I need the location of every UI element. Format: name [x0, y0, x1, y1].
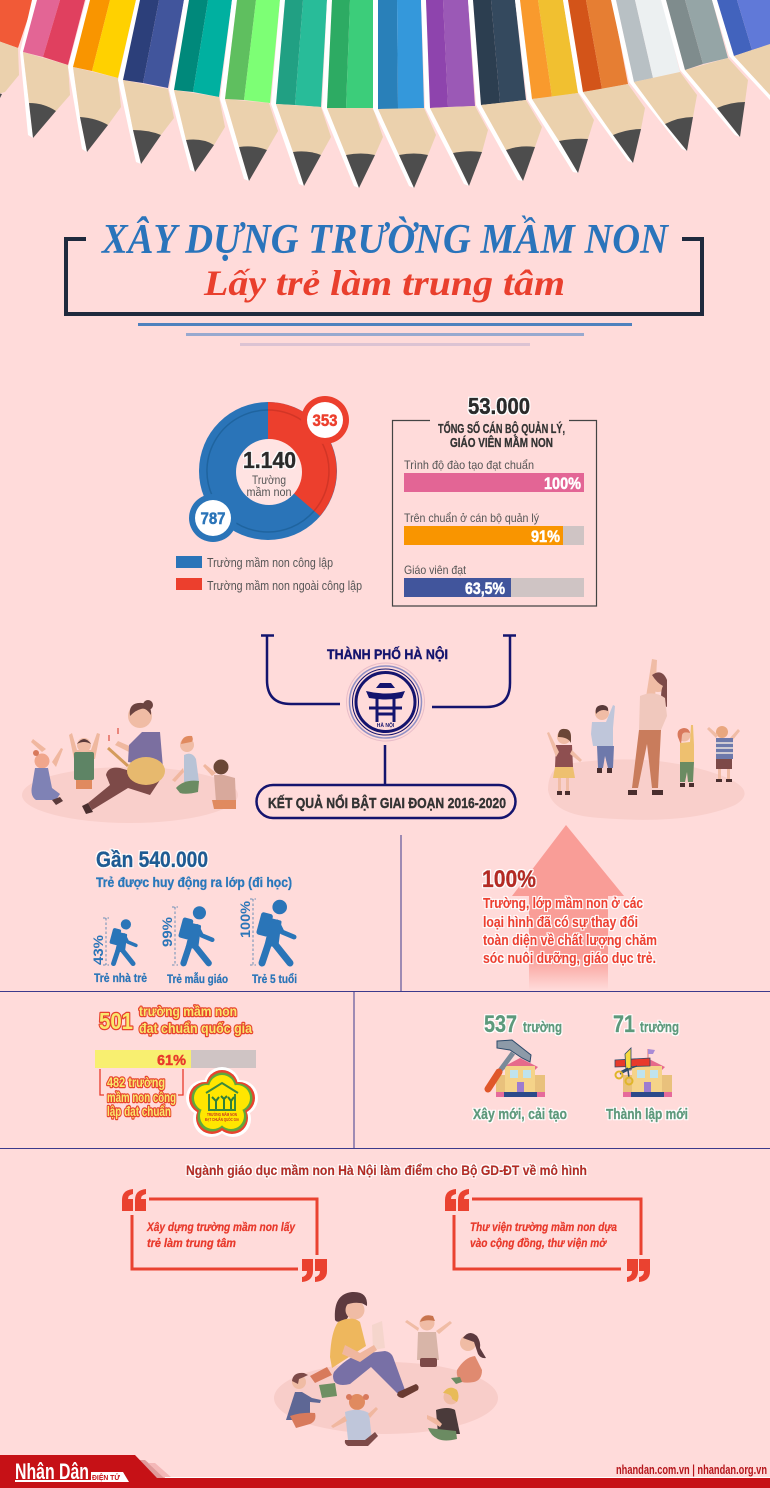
quote card: child-centred school [122, 1189, 327, 1282]
legend [176, 556, 362, 593]
staff heading: TỔNG SỐ CÁN BỘ QUẢN LÝ, [438, 421, 565, 436]
badge 353 [301, 396, 349, 444]
subheading: Trẻ được huy động ra lớp (đi học) [96, 874, 292, 890]
panel: staff statistics [392, 393, 596, 606]
walker 99% [159, 906, 212, 965]
icon: national standard badge: TRƯỜNG MẦM NON [207, 1112, 237, 1117]
walker labels: Trẻ mẫu giáo [167, 971, 228, 986]
quote text: Thư viện trường mầm non dựa [470, 1220, 617, 1234]
stat: 537 schools [484, 1011, 562, 1038]
headline: trường mầm non [139, 1003, 237, 1019]
subtitle: Lấy trẻ làm trung tâm [203, 263, 565, 303]
badge 787: 787 [200, 509, 226, 528]
quote text: vào cộng đồng, thư viện mở [470, 1236, 608, 1250]
result pill: KẾT QUẢ NỔI BẬT GIAI ĐOẠN 2016-2020 [268, 794, 506, 812]
Hanoi heading: THÀNH PHỐ HÀ NỘI [327, 645, 448, 662]
icon: national standard badge [186, 1067, 258, 1137]
bar: above standard managers: 91% [531, 527, 560, 546]
footer: Nhan Dan logo and band [0, 1455, 770, 1488]
walker labels: Trẻ nhà trẻ [94, 971, 147, 985]
progress bar 61% [95, 1050, 256, 1069]
description: sóc nuôi dưỡng, giáo dục trẻ. [483, 951, 656, 967]
illustration: teacher exercising with children [547, 659, 745, 820]
badge 787 [189, 494, 237, 542]
bar: teachers [404, 563, 584, 598]
icon: house with hammer [488, 1040, 545, 1097]
heading: pilot models: Ngành giáo dục mầm non Hà Nội làm điểm cho Bộ GD-ĐT về mô hình [186, 1162, 587, 1178]
description: Trường, lớp mầm non ở các [483, 896, 643, 912]
icon: closing quote [627, 1259, 650, 1282]
description: toàn diện về chất lượng chăm [483, 933, 657, 949]
percent: 100% [482, 866, 536, 893]
donut chart: 1.140 schools [189, 396, 349, 542]
stat: 71 schools: trường [640, 1019, 679, 1036]
panel: children enrolled [90, 847, 297, 986]
description [483, 896, 657, 967]
total label: Trường [252, 475, 286, 487]
bar: trained to standard: Trình độ đào tạo đạt chuẩn [404, 458, 534, 472]
panel: 100% schools changed [482, 825, 657, 990]
logo tag [15, 1472, 129, 1482]
walker 43% [90, 918, 136, 965]
bar: above standard managers [404, 511, 584, 546]
quote text: Xây dựng trường mầm non lấy [146, 1220, 296, 1234]
title: XÂY DỰNG TRƯỜNG MẦM NON [100, 215, 670, 263]
public schools note: 482 trường [107, 1075, 165, 1090]
title block [66, 215, 702, 314]
bar: teachers: 63,5% [465, 579, 505, 598]
bar: teachers: Giáo viên đạt [404, 563, 467, 577]
stat: 71 schools: 71 [613, 1011, 635, 1038]
stat: 71 schools [613, 1011, 679, 1038]
headline [99, 1003, 252, 1036]
illustration: teacher reading to children [274, 1292, 498, 1446]
label: newly established: Thành lập mới [606, 1106, 688, 1123]
walker 100% [237, 899, 294, 965]
description: loại hình đã có sự thay đổi [483, 915, 638, 931]
stat: 537 schools: 537 [484, 1011, 517, 1038]
title frame [66, 239, 702, 314]
public schools note: mầm non công [107, 1090, 176, 1105]
legend: Trường mầm non ngoài công lập [207, 579, 362, 593]
icon: opening quote [122, 1189, 146, 1211]
quote card: open library [445, 1189, 650, 1282]
panel: 501 national standard schools [95, 1003, 258, 1137]
bar: above standard managers: Trên chuẩn ở cán bộ quản lý [404, 511, 539, 525]
headline: 501 [99, 1008, 133, 1034]
walker 99%: 99% [159, 916, 175, 947]
staff total: 53.000 [468, 393, 530, 419]
Hanoi connector brackets [261, 636, 516, 784]
donut chart: 1.140 schools: mầm non [246, 487, 292, 499]
bar: trained to standard: 100% [544, 474, 581, 493]
pencils banner [0, 0, 770, 188]
legend: Trường mầm non công lập [207, 556, 333, 570]
walker 100%: 100% [237, 900, 253, 938]
icon: national standard badge: ĐẠT CHUẨN QUỐC GIA [205, 1117, 239, 1122]
label: build and renovate: Xây mới, cải tạo [473, 1106, 567, 1123]
arrow up [512, 825, 624, 990]
walker labels [94, 971, 297, 986]
headline: đạt chuẩn quốc gia [139, 1020, 252, 1036]
staff heading [438, 421, 565, 450]
result pill [256, 785, 516, 818]
icon: Hanoi emblem [346, 663, 424, 741]
logo wordmark: Nhân Dân [15, 1459, 89, 1484]
bar: trained to standard [404, 458, 584, 493]
illustration: teacher playing guitar with children [22, 700, 238, 823]
badge 353: 353 [312, 411, 338, 430]
walker 43%: 43% [90, 934, 106, 965]
icon: closing quote [302, 1259, 327, 1282]
icon: house with ribbon and scissors [615, 1048, 672, 1097]
stat: 537 schools: trường [523, 1019, 562, 1036]
icon: Hanoi emblem: HÀ NỘI [377, 721, 395, 729]
logo tag: ĐIỆN TỬ [92, 1473, 120, 1482]
panel: built and newly established schools [473, 1011, 688, 1123]
quote text [470, 1220, 617, 1250]
walker labels: Trẻ 5 tuổi [252, 972, 297, 986]
total value: 1.140 [243, 447, 296, 473]
quote text [146, 1220, 296, 1250]
public schools note [107, 1075, 176, 1119]
quote text: trẻ làm trung tâm [147, 1236, 236, 1250]
icon: opening quote [445, 1189, 469, 1211]
staff heading: GIÁO VIÊN MẦM NON [450, 435, 553, 450]
public schools note: lập đạt chuẩn [107, 1104, 171, 1119]
headline number: Gần 540.000 [96, 847, 208, 872]
progress bar 61%: 61% [157, 1052, 186, 1069]
